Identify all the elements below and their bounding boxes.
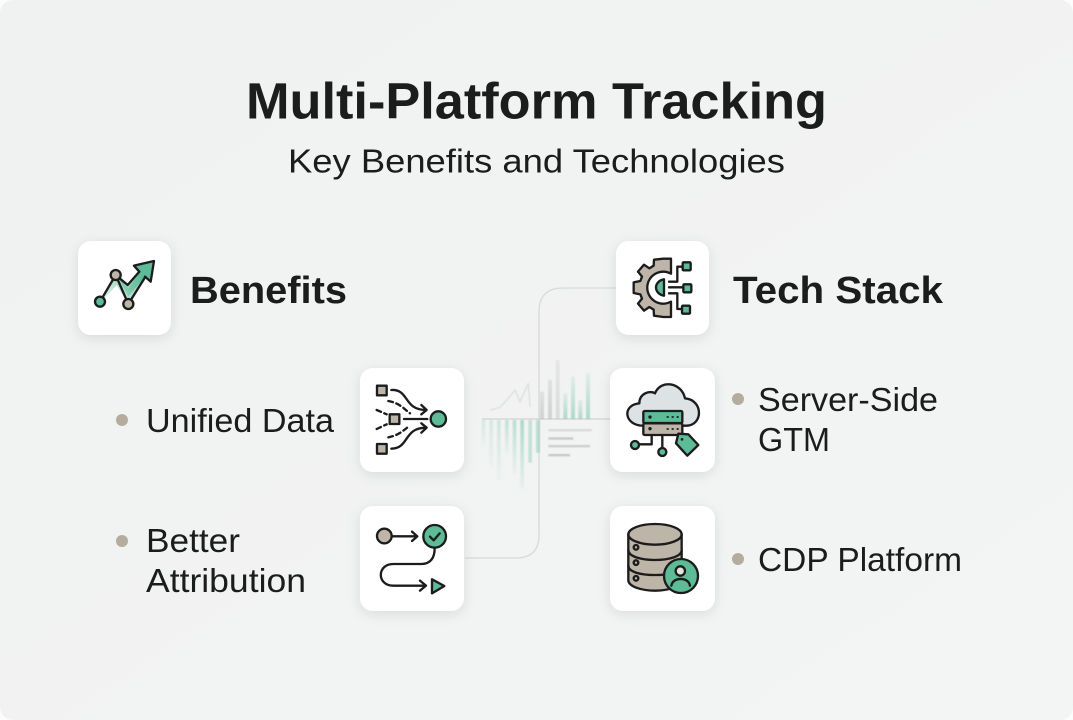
label: server-side gtm <box>758 381 938 458</box>
label: better attribution: Attribution <box>146 562 306 599</box>
icon card: unified data <box>360 368 464 472</box>
panel: tech stack header icon <box>616 241 709 335</box>
bullet: server-side gtm <box>732 393 744 405</box>
label: server-side gtm: Server-Side <box>758 381 938 418</box>
central data graphic <box>482 360 592 488</box>
icon card: better attribution <box>360 506 464 611</box>
label: unified data: Unified Data <box>146 402 335 439</box>
label: better attribution: Better <box>146 522 240 559</box>
label: server-side gtm: GTM <box>758 421 830 458</box>
icon card: cdp platform <box>610 506 715 611</box>
bullet: better attribution <box>116 535 128 547</box>
panel: benefits header icon <box>78 241 171 335</box>
label: better attribution <box>146 522 306 599</box>
bullet: unified data <box>116 414 128 426</box>
heading: benefits: Benefits <box>190 270 347 312</box>
connector lines <box>465 288 616 558</box>
title: Multi-Platform Tracking <box>246 72 827 130</box>
icon card: server-side gtm <box>610 368 715 472</box>
label: cdp platform: CDP Platform <box>758 541 962 578</box>
bullet: cdp platform <box>732 553 744 565</box>
heading: tech stack: Tech Stack <box>733 270 944 312</box>
subtitle: Key Benefits and Technologies <box>288 142 785 180</box>
